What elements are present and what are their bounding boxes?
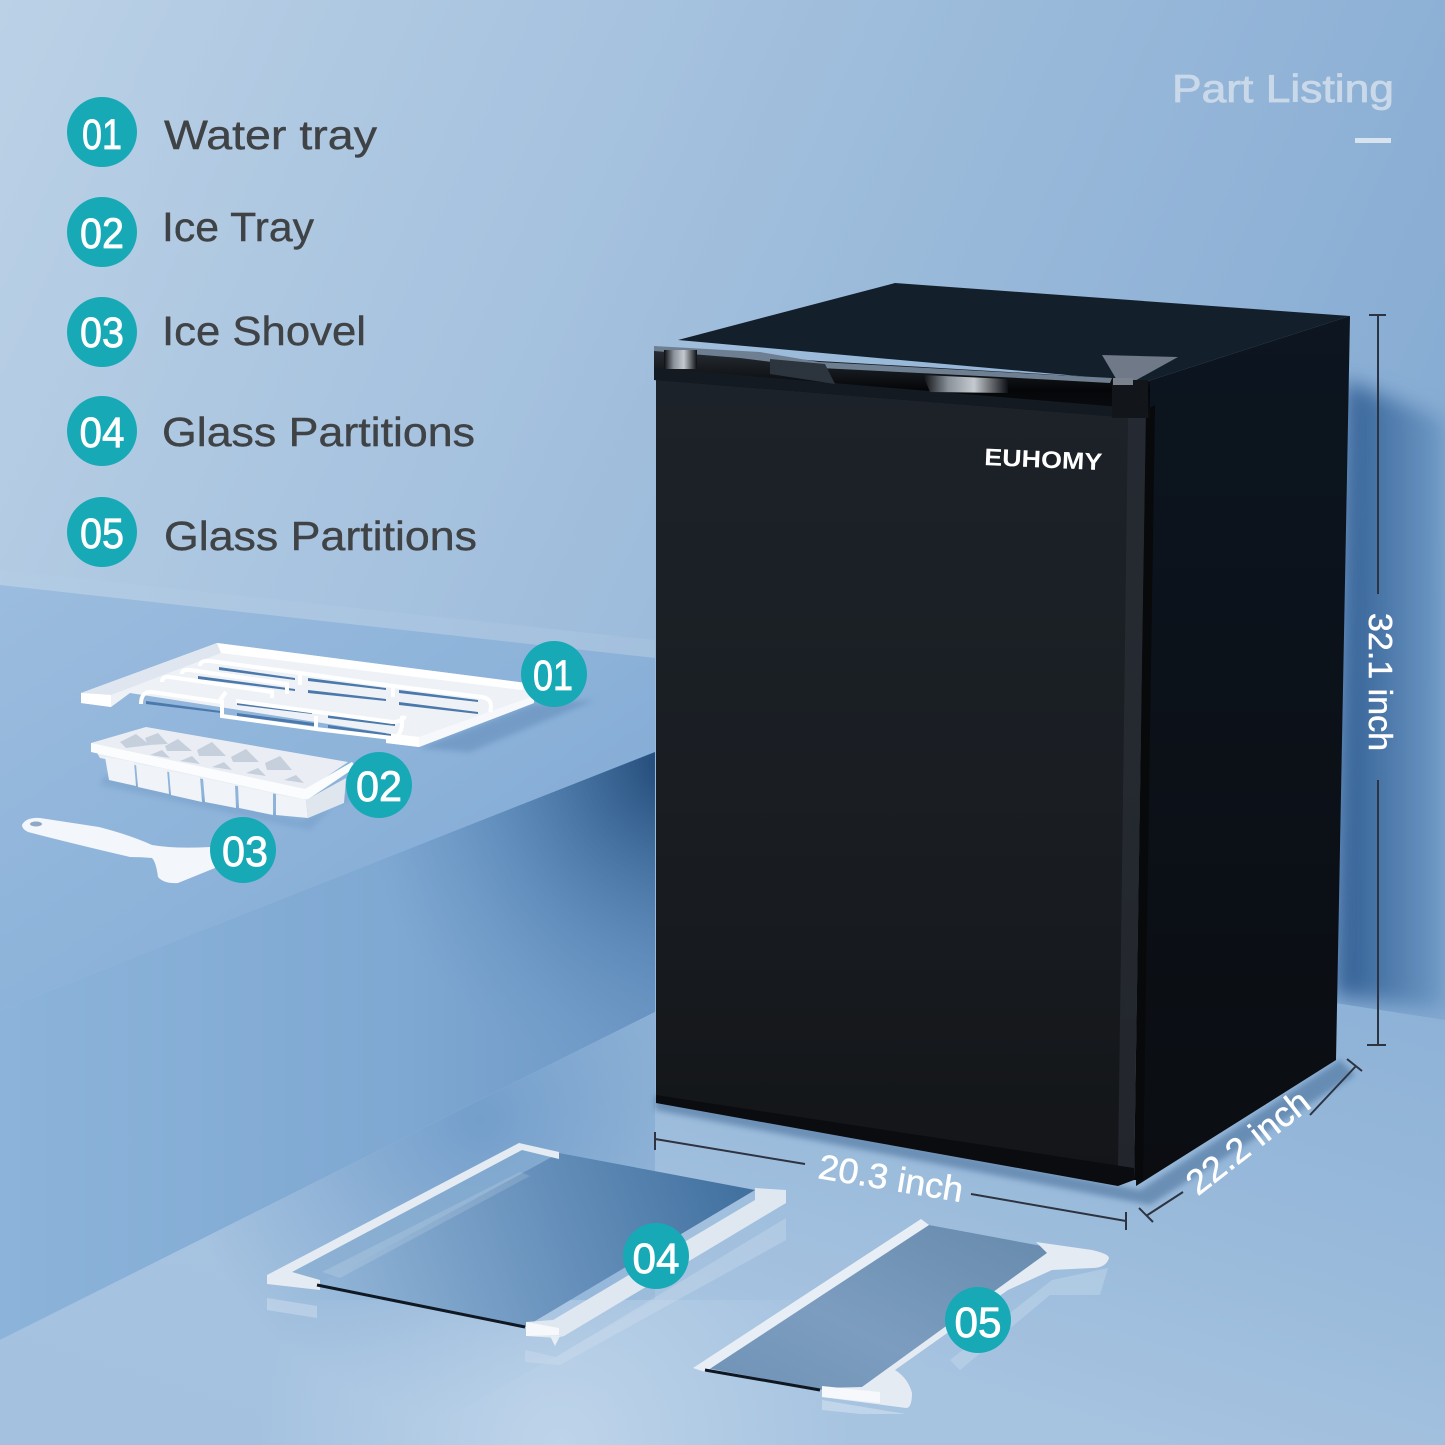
door top bar highlight (654, 346, 1112, 383)
list item 01: Water tray (164, 112, 378, 158)
hinge (1102, 355, 1178, 383)
handle chrome right (923, 375, 1008, 393)
dimension: depth 22.2 inch: 22.2 inch (1179, 1082, 1318, 1203)
background: ledge top surface (0, 585, 655, 1010)
list item 01: 01 (82, 111, 122, 159)
list item 03 (67, 297, 366, 367)
dimension: width 20.3 inch: 20.3 inch (816, 1147, 966, 1210)
list item 05 (67, 497, 477, 567)
background: floor (0, 1003, 1445, 1445)
background: right wall shadow (1335, 380, 1445, 1010)
handle lip (654, 368, 1121, 417)
list item 04 (67, 396, 475, 466)
list item 01 (67, 97, 378, 167)
list item 03: Ice Shovel (162, 308, 366, 354)
brand logo: EUHOMY (984, 444, 1103, 476)
glass partition 05 (693, 1219, 1109, 1414)
list item 04: Glass Partitions (162, 409, 475, 455)
callout 01: 01 (533, 652, 573, 700)
dimension: height 32.1 inch: 32.1 inch (1362, 613, 1399, 751)
list item 05: 05 (80, 510, 124, 558)
list item 05: Glass Partitions (164, 513, 477, 559)
dimension: width 20.3 inch (655, 1132, 1126, 1230)
list item 02: 02 (80, 210, 124, 258)
callout 02: 02 (356, 763, 402, 811)
callout 03 (210, 817, 276, 883)
water tray part (81, 643, 595, 752)
callout 01 (521, 641, 587, 707)
title: Part Listing (1172, 68, 1394, 143)
parts list (67, 97, 477, 567)
ice tray part (91, 727, 356, 830)
door top bar (654, 347, 1150, 418)
title: Part Listing: Part Listing (1172, 68, 1394, 111)
callout 05: 05 (954, 1299, 1002, 1347)
list item 02 (67, 197, 315, 267)
refrigerator (654, 283, 1355, 1205)
callout 02 (346, 752, 412, 818)
ice shovel part (22, 818, 215, 883)
callout 04 (623, 1223, 689, 1289)
background: ledge front face (0, 752, 655, 1340)
handle chrome left (664, 350, 697, 369)
fridge side (1136, 316, 1350, 1186)
list item 02: Ice Tray (162, 204, 315, 250)
fridge top (678, 283, 1350, 382)
list item 03: 03 (80, 309, 124, 357)
callout 04: 04 (632, 1235, 680, 1283)
callout 03: 03 (222, 828, 268, 876)
fridge door (656, 380, 1146, 1176)
fridge shadow on floor (655, 1060, 1355, 1205)
background: upper ledge back surface (0, 570, 655, 760)
callout 05 (945, 1287, 1011, 1353)
dimension: depth 22.2 inch (1139, 1059, 1362, 1222)
glass partition 04 (267, 1143, 786, 1365)
list item 04: 04 (80, 409, 124, 457)
handle shadow (770, 359, 835, 384)
